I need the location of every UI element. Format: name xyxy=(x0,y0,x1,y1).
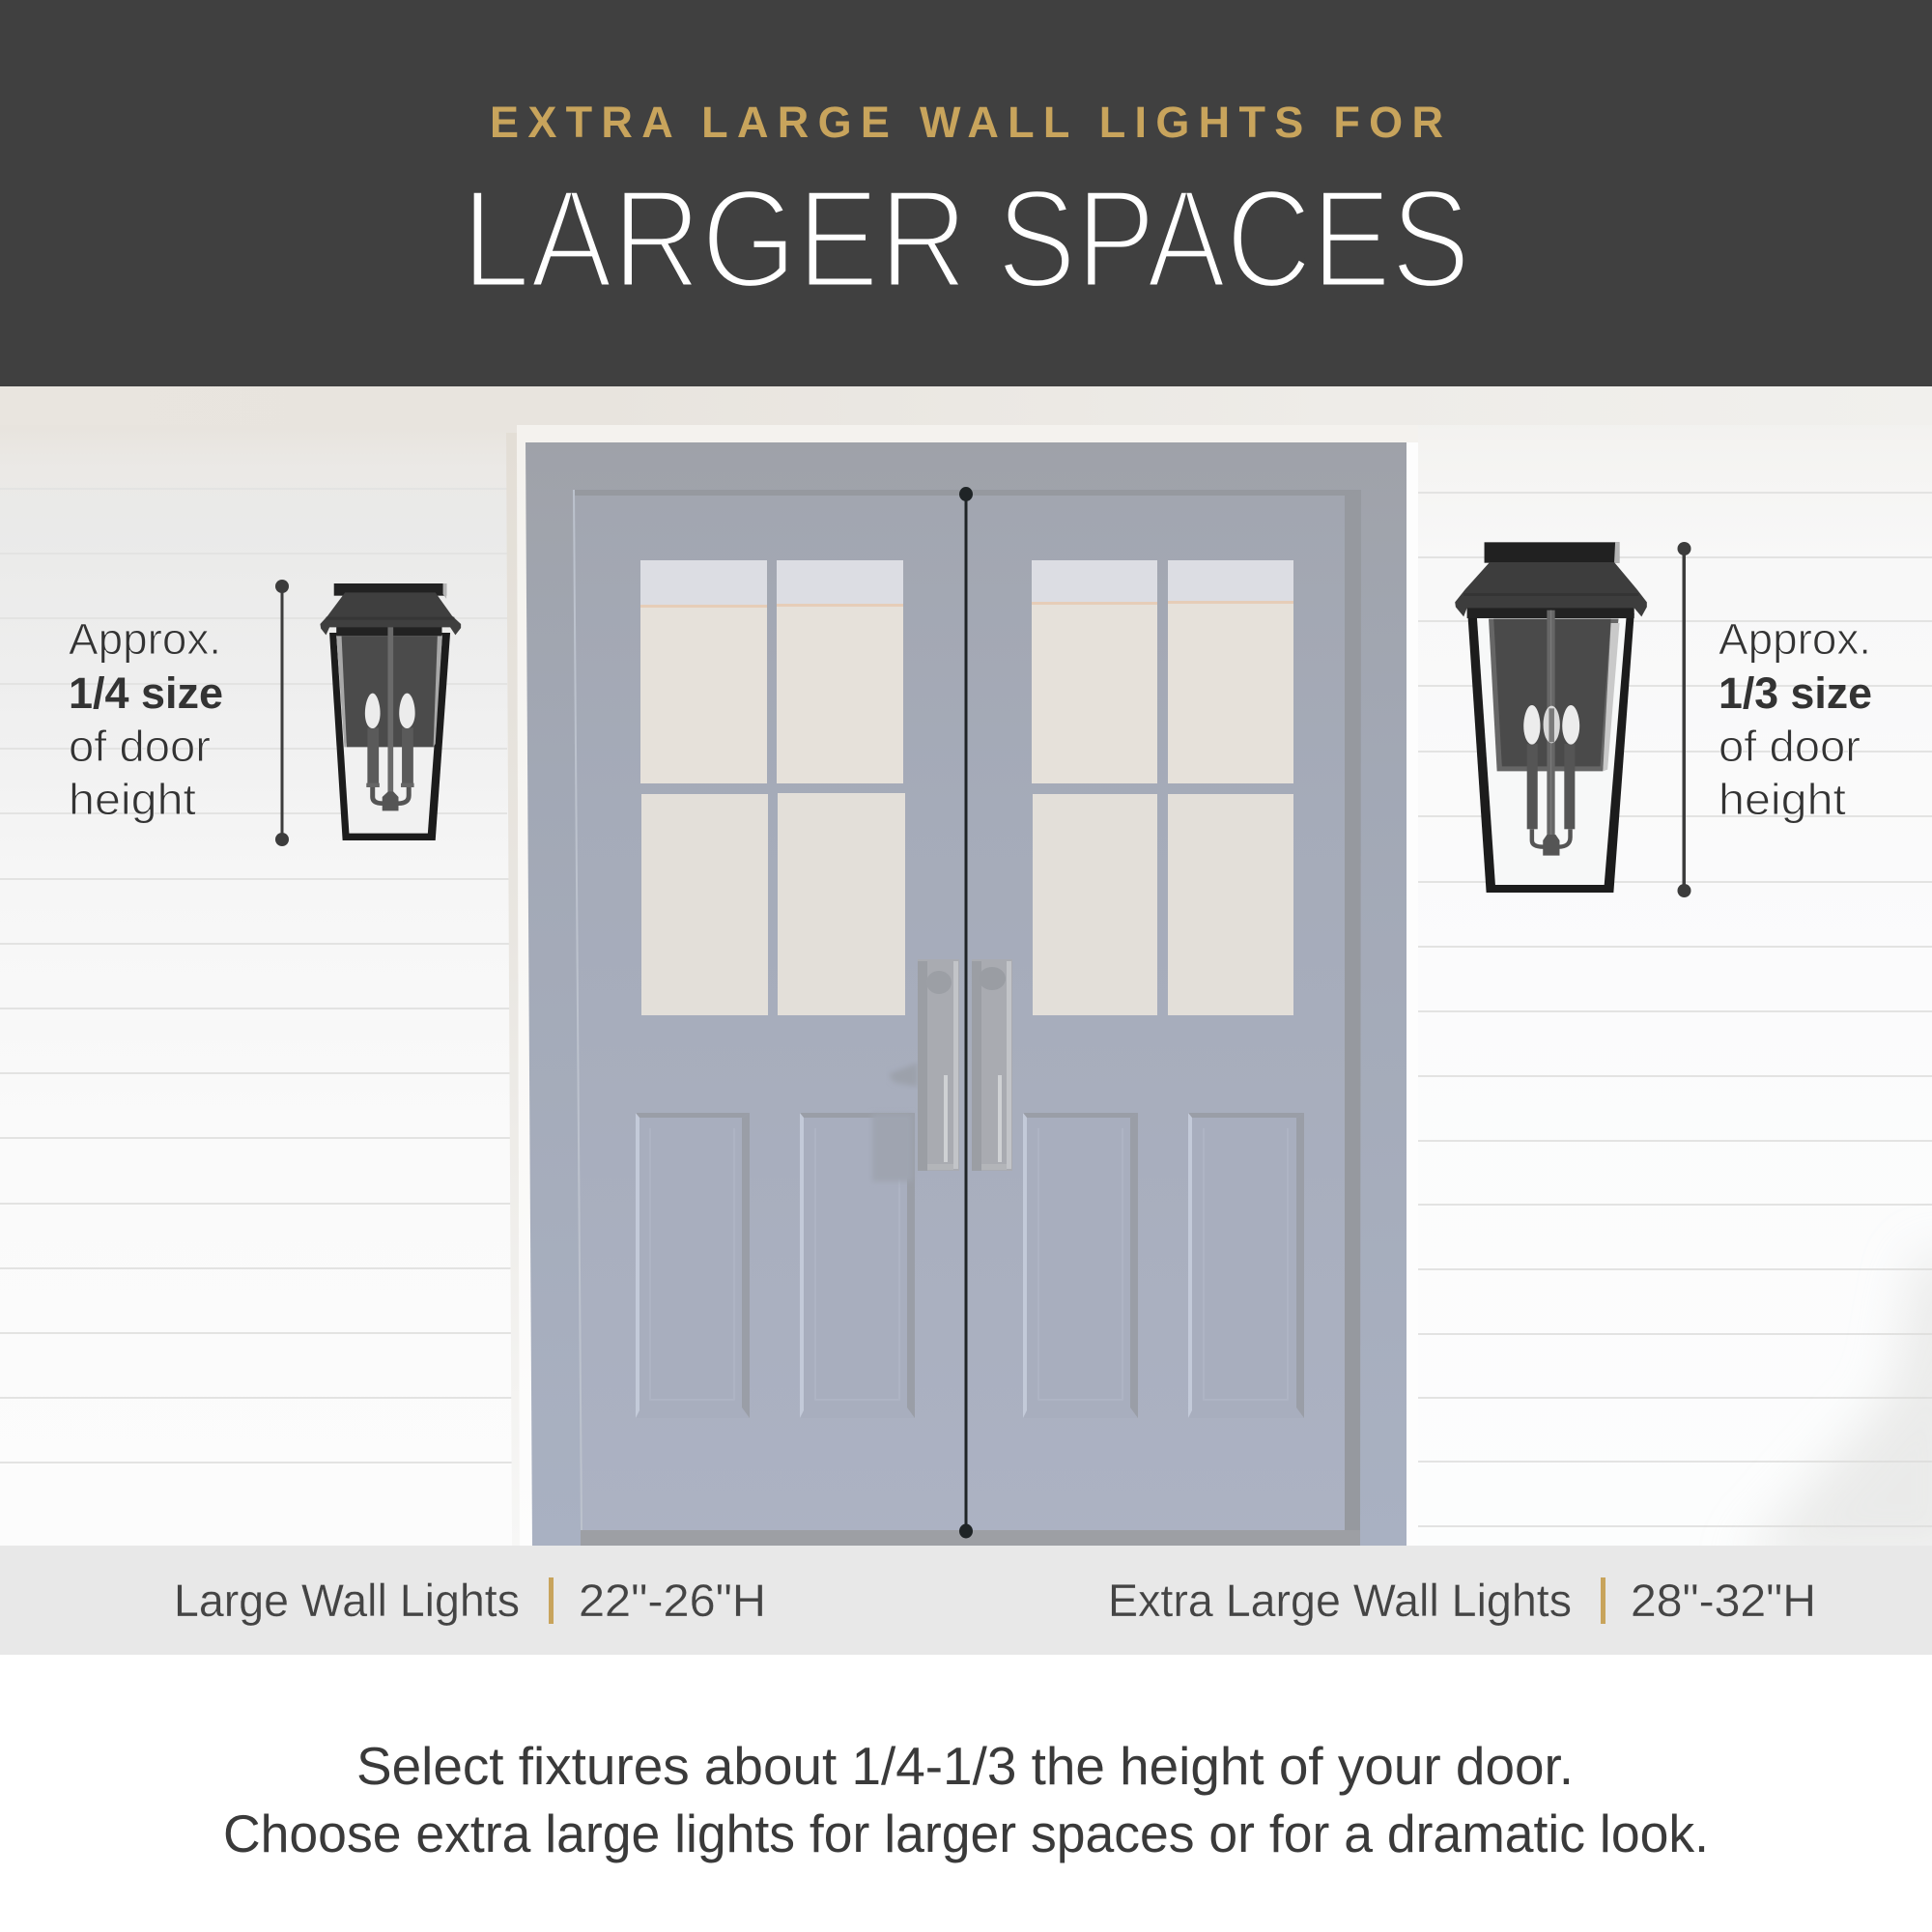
size label: large: 22"-26"H xyxy=(579,1575,766,1626)
door frame xyxy=(526,442,1406,1546)
size label: extra large: Extra Large Wall Lights xyxy=(1108,1575,1572,1626)
door leaves xyxy=(573,490,1361,1546)
right caption xyxy=(1719,614,1872,824)
door height measure line xyxy=(959,487,973,1538)
right caption: Approx. xyxy=(1719,614,1871,664)
header band xyxy=(0,0,1932,386)
left caption: height xyxy=(69,775,197,824)
main title: LARGER xyxy=(462,160,968,317)
eyebrow heading: EXTRA LARGE WALL LIGHTS FOR xyxy=(490,98,1443,147)
main title: SPACES xyxy=(997,160,1470,317)
icon: large wall lantern xyxy=(320,583,461,840)
right measure line xyxy=(1677,542,1690,897)
size label: large xyxy=(174,1575,766,1626)
left measure line xyxy=(275,580,289,846)
left caption: of door xyxy=(69,722,211,771)
footer advice text: Select fixtures about 1/4-1/3 the height of your door. xyxy=(356,1736,1574,1796)
door hardware xyxy=(872,959,1012,1181)
footer advice text xyxy=(223,1736,1709,1863)
size label: extra large xyxy=(1108,1575,1816,1626)
right caption: 1/3 size xyxy=(1719,668,1872,718)
threshold xyxy=(581,1530,1360,1546)
size band xyxy=(0,1546,1932,1655)
left caption: 1/4 size xyxy=(69,668,223,718)
icon: extra large wall lantern xyxy=(1455,542,1647,893)
left caption: Approx. xyxy=(69,614,221,664)
double door xyxy=(526,442,1406,1546)
raised door panels xyxy=(636,1113,1304,1418)
right caption: height xyxy=(1719,775,1847,824)
size label: large: Large Wall Lights xyxy=(174,1575,520,1626)
size label: extra large: 28"-32"H xyxy=(1631,1575,1816,1626)
left caption xyxy=(69,614,223,824)
window panes xyxy=(640,560,1293,1015)
footer advice text: Choose extra large lights for larger spaces or for a dramatic look. xyxy=(223,1804,1709,1863)
main title xyxy=(462,160,1470,317)
right caption: of door xyxy=(1719,722,1861,771)
house wall with siding xyxy=(0,386,1932,1565)
